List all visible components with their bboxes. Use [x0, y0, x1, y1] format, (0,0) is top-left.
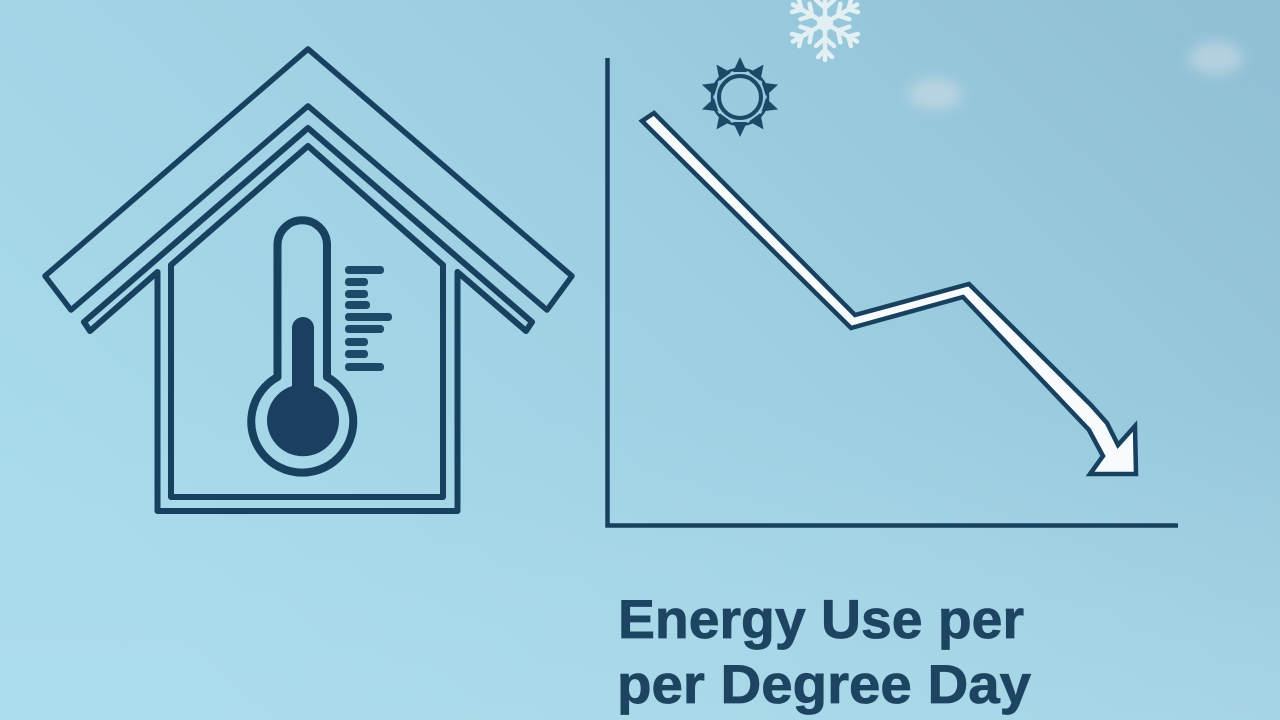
cloud: centre	[908, 78, 962, 110]
thermometer: scale ticks	[345, 266, 392, 371]
icon: thermometer	[251, 220, 392, 473]
thermometer: mercury	[267, 317, 339, 456]
thermometer: tube and bulb outline	[251, 220, 353, 473]
title: line one: Energy Use per	[618, 588, 1024, 650]
title	[617, 588, 1031, 715]
cloud: right	[1189, 41, 1243, 75]
icon: snowflake	[788, 0, 862, 60]
title: line two: per Degree Day	[617, 653, 1031, 715]
house: outer roof	[45, 49, 572, 310]
sun: spiked outer ring	[700, 57, 780, 137]
house: outer wall and eave	[84, 128, 532, 511]
sun: inner ring	[719, 76, 761, 118]
arrow: declining energy line	[642, 113, 1136, 474]
chart axes	[608, 58, 1178, 526]
house: inner wall	[171, 146, 443, 497]
icon: house with thermometer	[45, 49, 572, 511]
icon: sun	[700, 57, 780, 137]
